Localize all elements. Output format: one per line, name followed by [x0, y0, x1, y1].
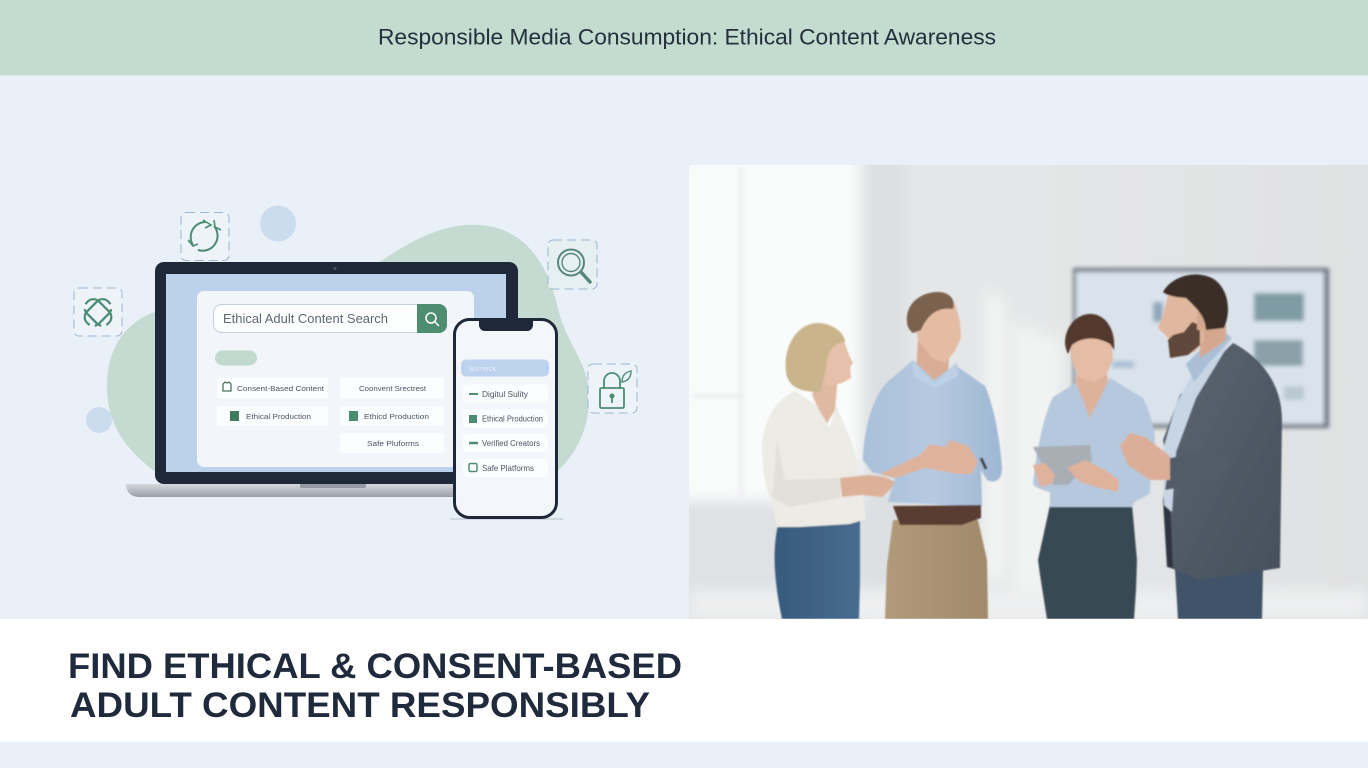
- blouse: [762, 391, 866, 527]
- hands: [1033, 460, 1119, 492]
- shirt: [863, 360, 1002, 507]
- face: [1158, 290, 1204, 357]
- laptop base: [126, 484, 470, 497]
- header band: [0, 0, 1368, 76]
- result: ethical production right: Ethicd Production: [364, 412, 429, 421]
- phone search field: [461, 360, 549, 376]
- tablet: [1033, 445, 1092, 485]
- clasped hands: [880, 440, 978, 478]
- forearm sleeve: [1164, 456, 1177, 491]
- neck: [916, 340, 950, 384]
- window light: [680, 155, 1368, 628]
- face: [824, 341, 854, 384]
- person: woman in light blue shirt: [1033, 314, 1155, 619]
- person: man in grey blazer: [1120, 274, 1282, 619]
- collar: [1186, 332, 1232, 382]
- icon: linked loops: [74, 288, 122, 336]
- decorative dot: top: [260, 206, 296, 242]
- face: [914, 303, 961, 363]
- phone item: digital safety: [463, 384, 548, 402]
- result: ethical production left: [217, 406, 328, 426]
- result: content search: [340, 378, 444, 398]
- result: safe platforms: [340, 433, 444, 453]
- laptop: [126, 262, 518, 497]
- panel: device illustration: [74, 206, 637, 519]
- neck: [1200, 320, 1226, 358]
- belt: [893, 505, 981, 525]
- title: Responsible Media Consumption: Ethical Content Awareness: [378, 24, 996, 50]
- hair: [1163, 274, 1228, 330]
- green blob: [107, 225, 589, 504]
- window frames: [695, 168, 742, 490]
- result: content search: Coonvent Srectrest: [359, 384, 427, 393]
- main headline: FIND ETHICAL & CONSENT-BASED: [68, 646, 682, 686]
- phone item: ethical production: Ethical Production: [482, 414, 543, 424]
- result: ethical production left: Ethical Production: [246, 412, 311, 421]
- search bar: Ethical Adult Content Search: [223, 311, 388, 326]
- phone item: digital safety: Digitul Sulity: [482, 390, 528, 399]
- icon: circular arrows: [181, 212, 229, 260]
- decorative dot: lower left: [86, 407, 112, 433]
- hair: [1065, 314, 1114, 354]
- result: consent-based content: Consent-Based Content: [237, 384, 325, 393]
- laptop screen: [166, 274, 506, 472]
- phone item: ethical production: [463, 410, 548, 428]
- phone search field: Sorneck: [468, 364, 496, 373]
- blazer: [1163, 343, 1282, 580]
- watch: [981, 458, 986, 469]
- hair: [786, 323, 845, 392]
- beard: [1168, 322, 1200, 358]
- main headline: ADULT CONTENT RESPONSIBLY: [70, 685, 650, 725]
- trousers: [885, 520, 988, 619]
- panel: office photo: [680, 155, 1368, 628]
- phone item: verified creators: [463, 434, 548, 452]
- trousers: [1038, 505, 1137, 619]
- icon: magnifier: [548, 240, 597, 289]
- phone: [450, 320, 563, 519]
- shirt: [1033, 378, 1155, 507]
- laptop bezel: [155, 262, 518, 484]
- forearm and hand: [840, 475, 897, 497]
- phone notch: [479, 321, 533, 331]
- neck: [811, 380, 838, 424]
- jeans: [775, 519, 860, 619]
- result: ethical production right: [340, 406, 444, 426]
- hair: [907, 292, 954, 333]
- result: safe platforms: Safe Pluforms: [367, 439, 419, 448]
- search window: [197, 291, 474, 467]
- person: man in blue shirt: [863, 292, 1002, 619]
- phone item: safe platforms: [463, 459, 548, 477]
- footer band: [0, 619, 1368, 742]
- ear: [1197, 312, 1205, 330]
- phone item: safe platforms: Safe Platforms: [482, 464, 534, 473]
- sleeve shadow: [772, 446, 840, 506]
- shirt: [1163, 342, 1230, 512]
- icon: padlock with leaf: [588, 364, 637, 413]
- face: [1070, 335, 1113, 382]
- main headline: [68, 646, 682, 725]
- tablet held between colleagues: [891, 477, 892, 478]
- hands: [1120, 433, 1170, 480]
- person: woman in white blouse: [762, 323, 897, 619]
- phone item: verified creators: Verified Creators: [482, 439, 540, 448]
- result: consent-based content: [217, 378, 328, 398]
- filter pill: [215, 350, 257, 366]
- lower front shadow: [1163, 500, 1173, 568]
- neck: [1075, 373, 1109, 418]
- wall display: [1073, 268, 1329, 428]
- trousers: [1175, 570, 1263, 619]
- collar: [912, 362, 958, 386]
- search bar: [214, 304, 447, 333]
